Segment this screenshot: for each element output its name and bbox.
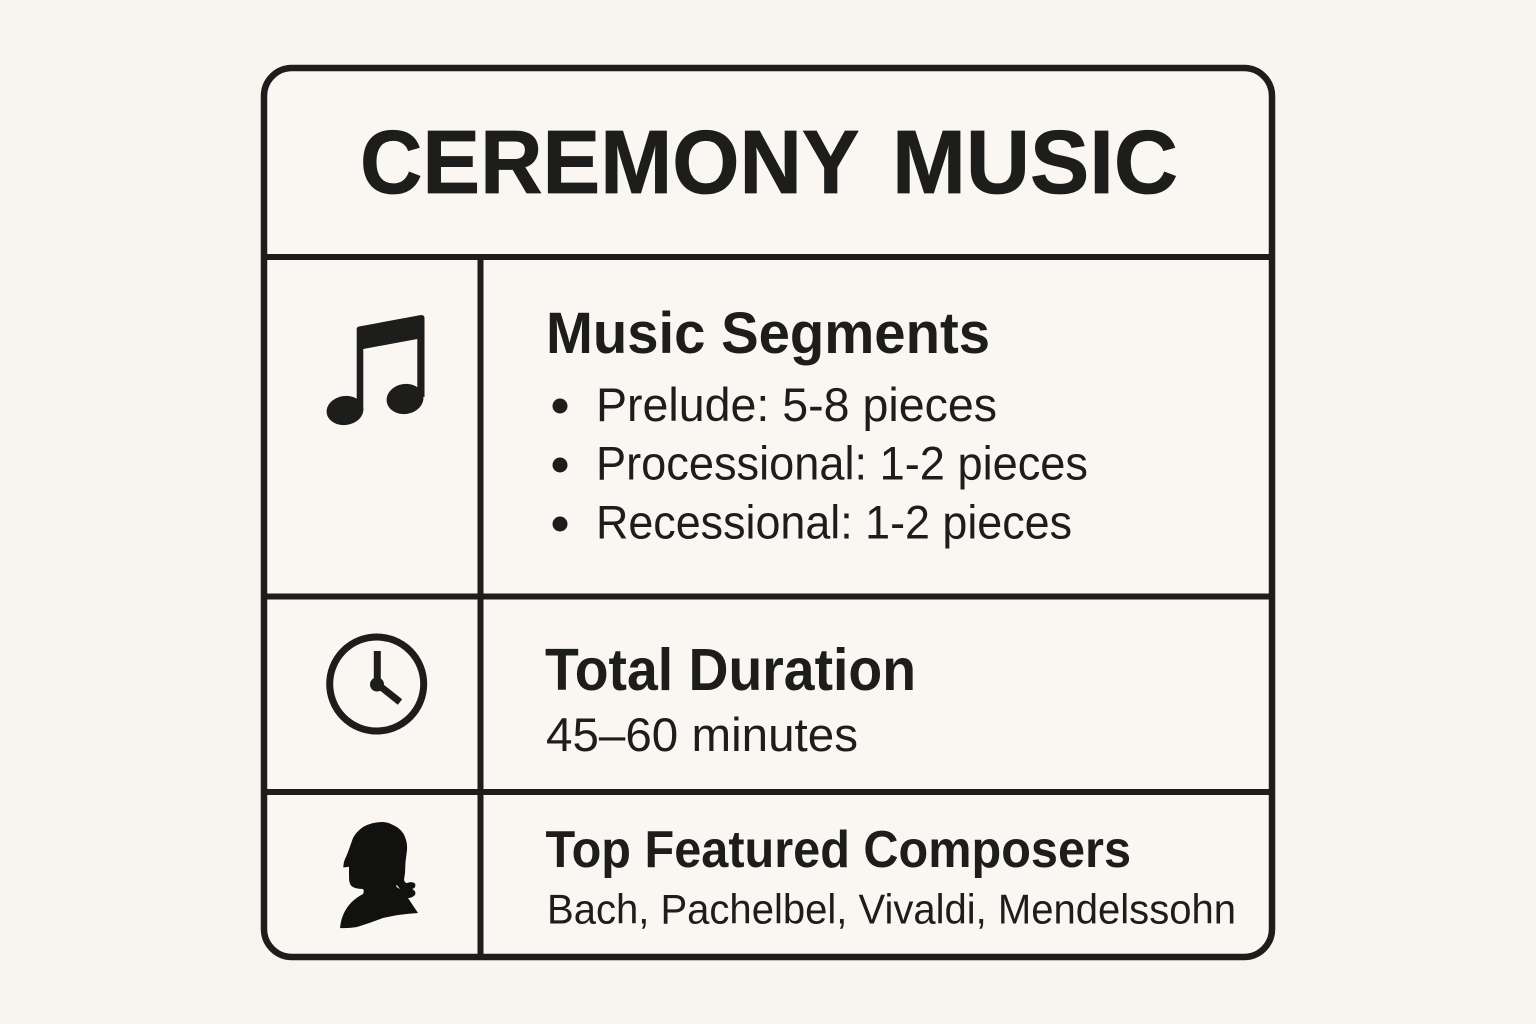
title: MUSIC (892, 113, 1178, 213)
heading: music segments: Music Segments (546, 301, 990, 366)
bullet list: segments: Prelude: 5-8 pieces (596, 378, 997, 431)
panel: music segments (546, 301, 1088, 548)
bullet list: segments: Processional: 1-2 pieces (596, 436, 1088, 490)
title: CEREMONY (360, 113, 859, 213)
bullet list: segments (552, 378, 1088, 548)
heading: total duration: Total Duration (545, 637, 916, 703)
icon: composer silhouette (340, 822, 418, 928)
text: composer names: Bach, Pachelbel, Vivaldi, Mendelssohn (547, 886, 1236, 932)
panel: total duration (545, 637, 916, 761)
panel: top featured composers (546, 821, 1236, 932)
bullet list: segments: Recessional: 1-2 pieces (596, 496, 1072, 548)
icon: music notes (325, 315, 425, 427)
text: duration value: 45–60 minutes (546, 708, 858, 761)
heading: top featured composers: Top Featured Composers (546, 821, 1131, 879)
icon: clock (330, 637, 424, 731)
panel: card frame and grid (264, 68, 1272, 957)
